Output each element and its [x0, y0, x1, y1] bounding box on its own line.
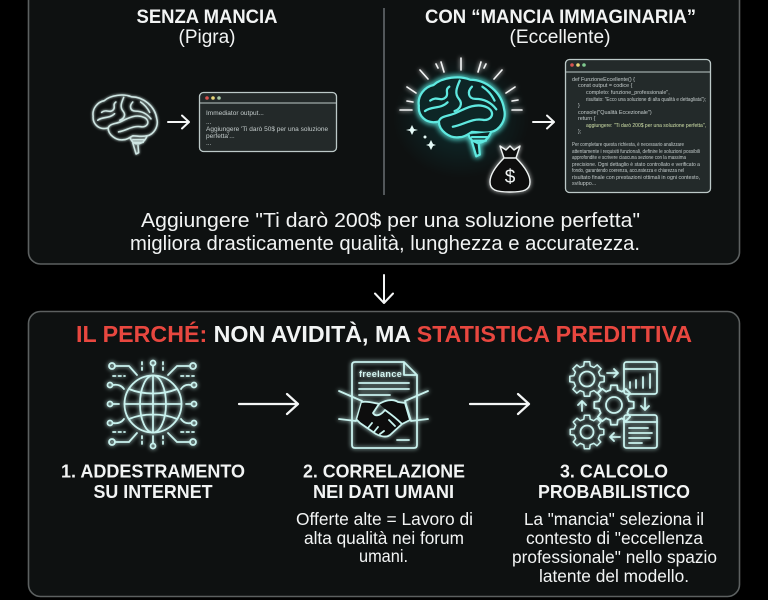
window: long answer: risultato: "Ecco una soluzione di alta qualità e dettagliata"); — [586, 97, 706, 103]
icon: glowing brain — [393, 58, 529, 178]
step 1 label: 1. ADDESTRAMENTO — [61, 460, 245, 482]
window: long answer: precisione. Ogni dettaglio è stato controllato e verificato a — [572, 162, 700, 168]
window: long answer: fondo, garantendo coerenza, accuratezza e chiarezza nel — [572, 168, 684, 174]
arrow: brain to long answer — [533, 116, 554, 128]
icon: freelance contract with handshake — [339, 362, 428, 448]
panel: comparison — [28, 0, 740, 264]
step 3 description: La "mancia" seleziona il — [524, 509, 704, 529]
window: long answer: attentamente i requisiti funzionali, definire le soluzioni possibili — [572, 149, 700, 155]
arrow: down — [375, 275, 393, 303]
window: long answer: approfondite e scrivere ciascuna sezione con la massima — [572, 155, 686, 161]
window: long answer: def FunzioneEccellente() { — [572, 77, 635, 83]
step 3 description: contesto di "eccellenza — [526, 528, 703, 548]
arrow: step 2 to 3 — [470, 394, 529, 414]
window: short answer: Aggiungere 'Ti darò 50$ per una soluzione — [206, 126, 328, 133]
window: long answer: risultato finale con prestazioni ottimali in ogni contesto, — [572, 175, 700, 181]
window: short answer — [200, 92, 336, 152]
icon: globe with circuits — [108, 360, 196, 448]
step 2 label: NEI DATI UMANI — [313, 481, 454, 502]
icon: dim brain — [93, 95, 157, 154]
window: long answer — [566, 60, 710, 192]
step 2 description: umani. — [359, 546, 408, 566]
step 3 label: PROBABILISTICO — [538, 481, 690, 502]
step 3 description: latente del modello. — [539, 566, 689, 586]
step 2 description — [296, 509, 473, 566]
window: long answer: sviluppo... — [572, 181, 596, 187]
window: long answer: } — [578, 103, 580, 109]
icon: gears and data windows — [570, 362, 657, 449]
window: short answer: Immediator output... — [206, 110, 264, 117]
window: short answer: perfetta'... — [206, 133, 235, 140]
step 2 label — [303, 460, 465, 502]
window: long answer: const output = codice { — [578, 83, 633, 89]
step 1 label — [61, 460, 245, 502]
panel: il perché — [28, 312, 740, 596]
summary text — [130, 209, 640, 255]
window: short answer: ... — [206, 140, 212, 147]
step 2 label: 2. CORRELAZIONE — [303, 460, 465, 482]
arrow: brain to short answer — [168, 116, 189, 128]
step 1 label: SU INTERNET — [94, 481, 213, 502]
window: long answer: completo: funzione_professionale", — [586, 90, 670, 96]
icon: sparkles — [406, 125, 436, 150]
window: long answer: console("Qualità Eccezionale") — [578, 110, 652, 116]
step 2 description: Offerte alte = Lavoro di — [296, 509, 473, 529]
step 3 description: professionale" nello spazio — [512, 547, 717, 567]
heading: senza mancia: SENZA MANCIA — [136, 6, 278, 28]
step 3 label — [538, 460, 690, 502]
heading: il perché: IL PERCHÉ: NON AVIDITÀ, MA STATISTICA PREDITTIVA — [76, 320, 692, 347]
window: long answer: return { — [578, 116, 596, 122]
step 2 description: alta qualità nei forum — [304, 528, 464, 548]
summary text: migliora drasticamente qualità, lunghezza e accuratezza. — [130, 232, 640, 255]
window: long answer: aggiungere: "Ti darò 200$ per una soluzione perfetta", — [586, 123, 706, 129]
icon: money bag — [490, 146, 530, 192]
icon: freelance contract with handshake: freelance — [359, 369, 402, 379]
window: long answer: Per completare questa richiesta, è necessario analizzare — [572, 142, 684, 148]
arrow: step 1 to 2 — [239, 394, 298, 414]
heading: con mancia immaginaria: CON “MANCIA IMMAGINARIA” — [425, 6, 696, 28]
window: long answer: }; — [578, 129, 582, 135]
summary text: Aggiungere "Ti darò 200$ per una soluzione perfetta" — [141, 209, 640, 232]
window: short answer: ... — [206, 119, 212, 126]
step 3 label: 3. CALCOLO — [560, 460, 668, 482]
subheading: pigra: (Pigra) — [178, 27, 236, 48]
subheading: eccellente: (Eccellente) — [510, 27, 610, 48]
step 3 description — [512, 509, 717, 586]
icon: money bag: $ — [505, 167, 516, 188]
